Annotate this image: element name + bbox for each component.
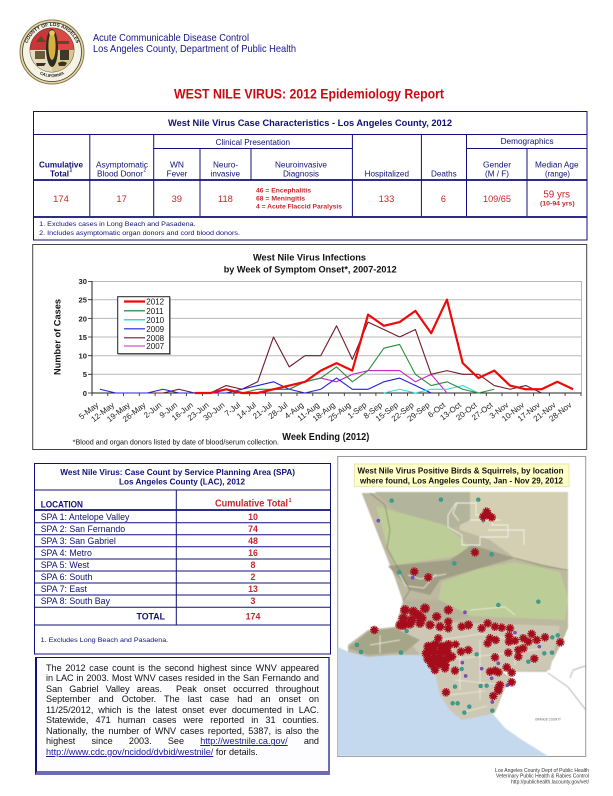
x axis date labels: 19-May xyxy=(105,400,132,424)
table footnotes: 1. Excludes cases in Long Beach and Pasadena. xyxy=(39,221,196,228)
column headers: 1 xyxy=(70,168,72,174)
header: department text: Acute Communicable Disease Control xyxy=(93,33,249,44)
y axis labels xyxy=(79,277,88,398)
column headers: WN xyxy=(170,160,184,170)
SPA values: 48 xyxy=(248,536,258,546)
map credit: Veterinary Public Health & Rabies Control xyxy=(496,774,589,780)
y axis labels: 0 xyxy=(83,389,87,398)
chart title: West Nile Virus Infections xyxy=(253,253,366,264)
column headers: Cumulative xyxy=(39,160,83,170)
SPA names: SPA 1: Antelope Valley xyxy=(41,512,130,522)
SPA names: SPA 3: San Gabriel xyxy=(41,536,116,546)
table heading: Los Angeles County (LAC), 2012 xyxy=(119,476,245,486)
x axis date labels: 18-Aug xyxy=(311,400,337,423)
x axis date labels: 13-Oct xyxy=(438,400,464,422)
national forest xyxy=(376,506,470,565)
table heading: West Nile Virus Case Characteristics - Los Angeles County, 2012 xyxy=(168,117,452,128)
SPA names xyxy=(41,512,130,606)
county label: ORANGE COUNTY xyxy=(535,718,562,722)
text block: summary narrative: The 2012 case count is the second highest since WNV appeared xyxy=(46,662,319,672)
county land xyxy=(348,493,568,720)
column headers: 2 xyxy=(144,168,146,174)
data row: 174 xyxy=(53,193,69,204)
data row: 4 = Acute Flaccid Paralysis xyxy=(256,203,342,210)
text block: summary narrative: San Gabriel Valley areas. Peak onset occurred throughout xyxy=(46,684,319,694)
total row xyxy=(136,612,260,622)
x axis date labels: 7-Jul xyxy=(223,400,242,418)
SPA values: 2 xyxy=(251,572,256,582)
icon: Los Angeles County seal xyxy=(20,20,84,84)
column headers: Neuroinvasive xyxy=(275,160,327,170)
y axis labels: 10 xyxy=(79,352,87,361)
x axis date labels: 3-Nov xyxy=(488,400,510,421)
x axis date labels: 23-Jun xyxy=(186,400,211,423)
line: 2008 xyxy=(147,322,542,393)
line: 2007 xyxy=(258,371,447,393)
icon: Los Angeles County seal: COUNTY OF LOS ANGELES xyxy=(24,22,80,43)
column headers: Total xyxy=(50,169,69,179)
SPA values: 3 xyxy=(251,596,256,606)
x axis date labels xyxy=(77,400,573,424)
chart title: by Week of Symptom Onset*, 2007-2012 xyxy=(224,265,397,276)
x axis date labels: 12-May xyxy=(89,400,116,424)
data row: 46 = Encephalitis xyxy=(256,187,311,194)
text block: summary narrative: Statewide, 471 human cases were reported in 31 counties. xyxy=(46,715,319,725)
data row xyxy=(53,187,575,210)
data row: 39 xyxy=(172,193,182,204)
table heading: West Nile Virus: Case Count by Service Planning Area (SPA) xyxy=(60,467,295,477)
column headers: Clinical Presentation xyxy=(216,137,290,147)
column headers: Demographics xyxy=(501,136,554,146)
gridlines and axes xyxy=(88,281,582,396)
data row: 133 xyxy=(379,193,394,204)
column headers: Hospitalized xyxy=(365,169,409,179)
SPA names: SPA 2: San Fernando xyxy=(41,524,125,534)
x axis date labels: 8-Sep xyxy=(362,400,385,421)
column headers: Neuro- xyxy=(213,160,238,170)
y axis labels: 20 xyxy=(79,314,87,323)
map credit: Los Angeles County Dept of Public Health xyxy=(495,768,589,774)
y axis labels: 15 xyxy=(79,333,88,342)
column headers: Blood Donor xyxy=(97,169,143,179)
SPA values: 8 xyxy=(251,560,256,570)
chart legend: 2011 xyxy=(146,307,164,316)
map credit: http://publichealth.lacounty.gov/vet/ xyxy=(511,779,590,785)
text block: summary narrative: 11/25/2012, which is the latest onset ever documented in LAC. xyxy=(46,705,319,715)
column headers: Deaths xyxy=(431,169,457,179)
total row: 174 xyxy=(246,612,260,622)
data row: (10-94 yrs) xyxy=(540,201,575,208)
SPA names: SPA 6: South xyxy=(41,572,92,582)
map title box: West Nile Virus Positive Birds & Squirrels, by location xyxy=(358,466,564,476)
y axis labels: 30 xyxy=(79,277,87,286)
data row: 118 xyxy=(218,193,233,204)
column headers: (range) xyxy=(545,169,570,179)
SPA values: 10 xyxy=(248,512,258,522)
header: department text xyxy=(93,33,296,55)
column headers: Cumulative Total xyxy=(215,499,288,510)
x axis date labels: 22-Sep xyxy=(390,400,416,423)
markers: positive birds xyxy=(371,509,563,699)
line: 2011 xyxy=(242,344,494,393)
data row: 17 xyxy=(116,193,127,204)
data row: 68 = Meningitis xyxy=(256,195,305,202)
column headers: LOCATION xyxy=(41,500,83,510)
ocean xyxy=(338,647,548,756)
x axis date labels: 14-Jul xyxy=(235,400,258,421)
x axis date labels: 4-Aug xyxy=(283,400,305,421)
data row: 59 yrs xyxy=(543,190,570,200)
x axis date labels: 2-Jun xyxy=(142,400,163,420)
chart title xyxy=(224,253,397,276)
SPA values: 74 xyxy=(248,524,258,534)
chart legend: 2009 xyxy=(146,325,165,334)
chart legend xyxy=(118,297,171,355)
column headers: Median Age xyxy=(535,160,579,170)
SPA values xyxy=(248,512,258,606)
y axis title: Number of Cases xyxy=(52,299,64,375)
x axis date labels: 1-Sep xyxy=(346,400,369,421)
SPA names: SPA 8: South Bay xyxy=(41,596,111,606)
chart legend: 2008 xyxy=(146,334,165,343)
x axis date labels: 21-Nov xyxy=(532,400,558,423)
SPA names: SPA 7: East xyxy=(41,584,88,594)
text block: summary narrative: highest since 2003. See http://westnile.ca.gov/ and xyxy=(46,736,319,746)
total row: TOTAL xyxy=(136,612,166,622)
y axis labels: 25 xyxy=(79,296,88,305)
x axis date labels: 29-Sep xyxy=(406,400,432,423)
column headers xyxy=(41,498,292,510)
urban basin xyxy=(400,622,560,720)
column headers: Asymptomatic xyxy=(96,160,149,170)
y axis labels: 5 xyxy=(83,370,88,379)
map: terrain xyxy=(338,492,586,756)
x axis date labels: 17-Nov xyxy=(516,400,542,423)
column headers: invasive xyxy=(210,169,240,179)
x axis date labels: 9-Jun xyxy=(158,400,179,420)
text block: summary narrative xyxy=(35,657,330,775)
table heading xyxy=(60,467,295,486)
column headers: Gender xyxy=(483,160,511,170)
x axis date labels: 5-May xyxy=(77,400,100,421)
mountains xyxy=(388,545,515,595)
map credit xyxy=(495,768,590,785)
chart footnote: *Blood and organ donors listed by date of blood/serum collection. xyxy=(73,439,279,446)
text block: summary narrative: http://www.cdc.gov/ncidod/dvbid/westnile/ for details. xyxy=(46,747,258,757)
line: 2012 xyxy=(195,300,573,393)
x axis date labels: 27-Oct xyxy=(470,400,495,422)
title: WEST NILE VIRUS: 2012 Epidemiology Report xyxy=(174,86,444,102)
x axis date labels: 28-Nov xyxy=(547,400,573,423)
x axis date labels: 16-Jun xyxy=(170,400,195,423)
x axis date labels: 15-Sep xyxy=(374,400,400,423)
boundary lines xyxy=(448,503,524,545)
table footnote: 1. Excludes Long Beach and Pasadena. xyxy=(41,637,168,644)
text block: summary narrative: September and October. The last case had an onset on xyxy=(46,694,319,704)
line: 2010 xyxy=(384,386,478,393)
header: department text: Los Angeles County, Department of Public Health xyxy=(93,44,296,55)
desert xyxy=(460,492,568,570)
x axis date labels: 26-May xyxy=(121,400,148,424)
x axis date labels: 21-Jul xyxy=(251,400,274,421)
SPA names: SPA 4: Metro xyxy=(41,548,92,558)
table footnotes: 2. Includes asymptomatic organ donors and cord blood donors. xyxy=(39,230,240,237)
map title box: where found, Los Angeles County, Jan - Nov 29, 2012 xyxy=(359,475,563,485)
table footnotes xyxy=(39,221,240,237)
text block: summary narrative: Nationally, the number of WNV cases reported, 5387, is also the xyxy=(46,726,319,736)
x axis date labels: 25-Aug xyxy=(327,400,353,423)
column headers: Diagnosis xyxy=(283,169,319,179)
panel: case count by service planning area table xyxy=(34,464,331,654)
icon: Los Angeles County seal: CALIFORNIA xyxy=(40,72,64,78)
SPA values: 13 xyxy=(248,584,258,594)
panel: case characteristics table xyxy=(33,112,587,240)
column headers xyxy=(39,136,579,179)
x axis date labels: 6-Oct xyxy=(426,400,448,420)
x axis date labels: 20-Oct xyxy=(454,400,479,422)
chart legend: 2007 xyxy=(146,342,165,351)
column headers: 1 xyxy=(288,498,292,504)
data lines xyxy=(100,300,573,393)
panel: map of positive birds and squirrels xyxy=(338,456,586,756)
text block: summary narrative: in LAC in 2003. Most WNV cases resided in the San Fernando and xyxy=(46,673,319,683)
data row: 6 xyxy=(441,193,446,204)
SPA names: SPA 5: West xyxy=(41,560,90,570)
x axis date labels: 10-Nov xyxy=(500,400,526,423)
chart legend: 2010 xyxy=(146,316,165,325)
map title box xyxy=(354,464,569,487)
line: 2009 xyxy=(100,378,431,393)
x axis date labels: 28-Jul xyxy=(267,400,290,421)
panel: line chart of infections by week xyxy=(33,244,587,450)
x axis title: Week Ending (2012) xyxy=(282,432,369,443)
column headers: Fever xyxy=(167,169,188,179)
markers: squirrels and other sites xyxy=(355,498,560,715)
column headers: (M / F) xyxy=(485,169,509,179)
x axis date labels: 30-Jun xyxy=(202,400,226,423)
data row: 109/65 xyxy=(483,193,511,204)
chart legend: 2012 xyxy=(146,298,165,306)
SPA values: 16 xyxy=(248,548,258,558)
x axis date labels: 11-Aug xyxy=(296,400,321,423)
